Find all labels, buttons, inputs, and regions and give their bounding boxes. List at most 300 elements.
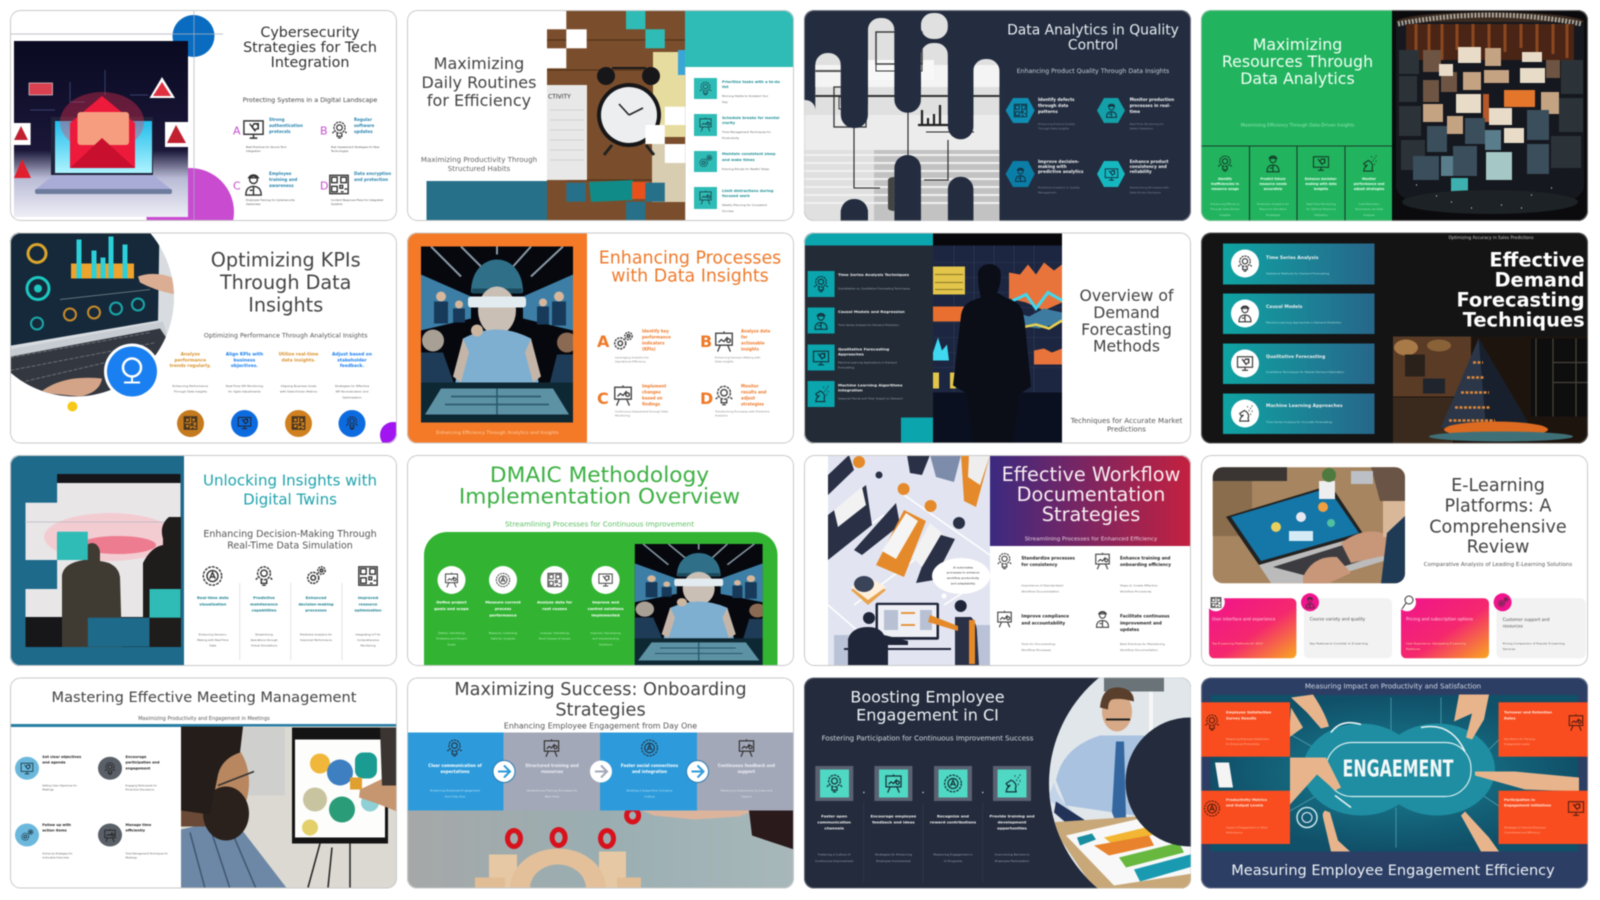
item C: based on [642,395,663,400]
item 3: Follow up with [42,823,72,827]
card: Boosting Employee Engagement [804,678,1254,888]
item 1 [694,78,780,104]
column 1: Enhancing Decision- [199,632,227,636]
photo: woman in visor [421,246,577,422]
step 1 [428,740,482,799]
item 4: Streamlining Processes with [1130,186,1169,190]
item 3: Forecasting [838,366,854,370]
column 4 [1354,156,1385,217]
title: DMAIC Methodology [490,462,709,488]
header panel: Strategies [1042,502,1140,526]
dark panel [804,232,933,444]
title: Methods [1093,336,1160,355]
step Define [434,566,469,646]
column 3 [1305,157,1338,217]
header panel: Documentation [1017,482,1165,506]
item 4 [1097,158,1169,195]
column 4: stakeholder [337,357,368,363]
item 3 [998,611,1069,652]
item 2: Encourage [126,755,147,759]
illustration: folders and workers [828,455,990,666]
column 4: Optimization [342,396,362,400]
item 3: action items [42,829,67,833]
subtitle: Real-Time Data Simulation [227,540,353,551]
item 1 [1006,96,1075,131]
title: Enhancing Processes [599,248,781,268]
box 3: User Experience: Navigating E-Learning [1406,641,1466,645]
item 2: Productive Discussions [126,787,155,791]
title: Review [1467,538,1529,558]
photo: people at heat map wall [25,474,181,647]
item B: B [700,332,712,351]
item 4: updates [1120,626,1140,632]
panel 2 [1223,294,1374,334]
column 3: Utilize real-time [279,351,318,357]
item A: protocols [269,128,291,134]
subtitle: Enhancing Decision-Making Through [203,528,377,540]
item 4: Limit distractions during [722,189,774,193]
item 3: Predictive Analytics in Quality [1038,186,1080,190]
title: Data Analytics [1240,68,1355,88]
column 2: accurately [1264,187,1283,191]
panel 4 [1223,394,1374,434]
item 3: Tools for Documenting [1020,642,1055,646]
pixel cut-outs [26,474,181,647]
column 4: performance and [1354,182,1385,186]
title: Demand [1494,268,1585,291]
step 4: Overcoming Barriers to [995,853,1030,857]
title: Maximizing [434,54,524,72]
card: Overview of Demand Forecasting [804,232,1191,444]
item A: performance [642,334,671,339]
item 2: Steps to Create Effective [1120,584,1157,588]
step 1: Clear communication of [428,762,482,768]
step Analyze: root causes [542,606,568,610]
item B: Technologies [330,149,349,153]
item 2 [694,114,779,140]
box 3 [1398,593,1489,658]
step 3: Recognize and [937,813,969,818]
item 4: consistency and [1130,164,1167,168]
column 2: Virtual Simulations [251,644,278,648]
step 4 [989,766,1035,863]
item 4: Facilitate continuous [1120,613,1170,618]
item C: C [597,389,609,408]
step Improve [588,566,624,646]
title: Insights [248,293,323,316]
step 3: Building a Supportive Company [627,789,673,793]
box 2: Course variety and quality [1310,616,1366,622]
column 4: Adjust based on [332,351,372,357]
footer title: Measuring Employee Engagement Efficiency [1231,863,1555,879]
item 2: participation and [126,761,160,765]
column 1: Through Data Insights [173,390,207,394]
item A [597,328,671,364]
column 4: feedback. [340,362,364,368]
title: Maximizing [1253,34,1342,54]
photo: laptop with warning email [14,41,188,217]
box 2: Key Features to Consider in E-Learning [1310,641,1368,645]
item 3: predictive analytics [1038,168,1084,174]
column 4: Monitor [1362,177,1376,181]
column 3: Improved Performance [300,638,332,642]
card: Measuring Employee Engagement [1201,678,1588,888]
item 1: Identify defects [1038,96,1075,102]
column 4: resource [359,601,378,606]
item 3: Improve decision- [1038,158,1080,164]
item D: Systems [331,202,343,206]
title: Implementation Overview [459,484,740,509]
step Define: Define project [436,599,467,604]
column 4 [355,567,382,648]
column 2: Predictive Analytics for [1257,202,1290,206]
item D: Monitor [741,383,759,388]
column 3: Predictive Analytics for [300,632,333,636]
item C: Continuous Assessment through Data [615,410,668,414]
step Improve: and Implementing [592,637,619,641]
photo: data cylinder [1392,10,1588,221]
column 1: Making with Real-Time [197,638,229,642]
box 4: Services [1503,647,1516,651]
item D: Incident Response Plans for Integrated [331,198,383,202]
item D: Analytics [715,414,728,418]
header panel: Streamlining Processes for Enhanced Efficiency [1025,536,1158,542]
item C: awareness [269,182,294,188]
step 2: feedback and ideas [872,819,915,824]
item 4: focused work [722,194,750,198]
title: Mastering Effective Meeting Management [52,689,357,706]
subtitle: Techniques for Accurate Market [1070,416,1183,424]
column 2: Streamlining [255,632,273,636]
panel 4: Machine Learning Approaches [1266,403,1343,409]
item 1: Setting Clear Objectives for [42,783,78,787]
step 4: Employee Participation [995,859,1029,863]
column 4: Analysis [1363,213,1375,217]
item 1: Morning Habits to Kickstart Your [722,94,769,98]
step 1: expectations [440,768,470,774]
title: Data Analytics in Quality [1007,23,1179,39]
item 3: Evening Rituals for Restful Sleep [722,167,769,171]
item 4: Meetings [126,855,138,859]
subtitle: Protecting Systems in a Digital Landscape [243,96,377,104]
item D: D [700,389,713,408]
card: Mastering Effective Meeting Management [10,678,397,888]
globe badge [104,344,160,400]
step Improve: implemented [591,612,620,617]
step Measure: Measure current [485,599,521,604]
item A: A [233,124,241,138]
item 4: Data-Driven Decisions [1130,191,1161,195]
item 2: processes in real- [1130,102,1171,108]
card: Optimizing KPIs [9,232,398,444]
speech bubble: AI automates [953,565,973,569]
item 4: reliability [1130,168,1152,174]
title: Optimizing KPIs [211,248,361,271]
item B: Enhancing Decision-Making with [715,356,761,360]
item 2: Defect Detection [1130,127,1154,131]
box top-right: Engagement Levels [1504,742,1530,746]
teal panel [685,10,794,67]
step Measure: Data for Analysis [491,637,516,641]
arrow 3 [686,760,708,782]
title: Forecasting [1081,320,1172,338]
subtitle: Streamlining Processes for Continuous Improvement [505,520,694,528]
item 2: Workflow Procedures [1120,590,1152,594]
arrow 2 [590,760,612,782]
card: E-Learning Platforms [1201,455,1588,666]
box top-left: Survey Results [1226,716,1256,720]
photo: dashboard on laptop [10,232,174,398]
box 4: resources [1503,623,1523,628]
item 1: Prioritize tasks with a to-do [722,80,780,84]
blue panel [10,455,184,666]
box bottom-right [1498,791,1588,844]
step Measure: Measure: Collecting [489,631,517,635]
item 4: Enhance product [1130,158,1169,164]
column 4: Comprehensive [357,638,379,642]
step 1: communication [817,819,851,824]
step 3: Measuring Engagement in [933,853,973,857]
photo: alarm clock on desk [547,10,685,221]
card: Maximizing Daily Routines [407,10,794,221]
subtitle: Enhancing Employee Engagement from Day One [504,722,697,730]
item B: updates [354,128,373,134]
item 1: for consistency [1021,562,1058,566]
item 1: Standardize processes [1021,555,1075,560]
column 1: Insights [1220,213,1231,217]
item 2 [1097,96,1174,131]
item 3 [694,151,776,172]
step 2 [871,766,917,863]
column 2: capabilities [252,607,277,612]
title: Unlocking Insights with [203,472,377,490]
column 4: optimization [355,607,382,612]
panel 3: Qualitative Forecasting [1266,354,1325,360]
box 1: User interface and experience [1212,616,1276,622]
title: Maximizing Success: Onboarding [454,680,747,700]
photo: alarm clock on desk: CTIVITY [548,94,571,100]
item 1: and agenda [42,761,66,765]
item B [320,116,380,153]
title: Techniques [1463,308,1585,331]
column 3: for Optimal Resource [1306,207,1336,211]
title: E-Learning [1451,476,1545,496]
subtitle: Optimizing Performance Through Analytical Insights [204,332,368,340]
item B: Risk Assessment Strategies for New [331,145,380,149]
speech bubble: and adaptability [951,581,975,585]
item B: for [741,334,747,339]
column 3: insights [1314,187,1328,191]
item A: A [597,332,610,351]
ENGAEMENT wordmark: ENGAEMENT [1342,756,1454,782]
column 3: Utilization [1314,213,1328,217]
step 1: Fostering a Culture of [818,853,851,857]
pixel cut-outs [547,10,685,221]
item 3: Approaches [838,351,865,356]
column 1: Enhancing Efficiency [1210,202,1240,206]
column 1: resource usage [1211,187,1239,191]
item 4 [98,823,169,859]
item 2: Time Management Techniques for [721,130,772,134]
item 2 [808,308,905,334]
step 1: Enhancing Employee Engagement [430,789,481,793]
item D: and protection [354,176,388,182]
item B: software [354,122,375,128]
column 1: visualization [199,601,227,606]
column 4: Techniques via Data [1354,207,1383,211]
orange panel [407,232,587,444]
item 1: list [722,85,729,89]
item D: strategies [741,401,765,406]
step Analyze: Analyze: Identifying [540,631,569,635]
title: Overview of [1080,286,1174,304]
column 4 [332,351,372,437]
column 4: Integrating IoT for [355,632,382,636]
item 3: Qualitative Forecasting [838,346,890,351]
card: Effective Demand Forecasting [1201,232,1588,444]
step Define: goals and scope [434,606,469,610]
item C [597,383,668,418]
item A: authentication [269,122,303,128]
column 2: Resource Allocation [1259,207,1287,211]
photo: man at whiteboard [181,726,397,888]
subtitle: Enhancing Product Quality Through Data Insights [1017,68,1169,75]
item D [700,383,770,418]
step 2: Streamlining Training Processes for [527,789,578,793]
column 3 [279,351,318,437]
step 2: New Hires [545,795,560,799]
title: Strategies for Tech [243,40,377,56]
item 1: patterns [1038,108,1058,114]
item A: indicators [642,340,665,345]
title: Effective [1489,248,1585,271]
item A: Identify key [642,328,669,333]
item C: training and [269,176,297,182]
panel 2: Causal Models [1266,304,1303,310]
subtitle: Predictions [1107,424,1146,433]
item B: Analyze data [741,328,771,333]
subtitle: Structured Habits [448,164,510,172]
item 1: Day [722,100,728,104]
item D: results and [741,389,767,394]
step Measure: process [495,606,512,610]
card: Maximizing Success Onboarding [407,678,794,888]
item D: D [320,180,328,192]
column 2: Align KPIs with [226,351,263,357]
panel 1: Time Series Analysis [1266,255,1319,261]
item 4: efficiently [126,829,146,833]
item C: Employee [269,170,292,176]
step 1 [815,766,854,863]
title: Through Data [219,270,351,294]
step 4: Impact [741,795,752,799]
item 4: Integration [838,387,863,392]
item B: insights [741,346,760,351]
photo: pyramid in a room [1393,336,1588,444]
item 2: clarity [722,121,736,125]
photo: woman in visor [635,544,766,666]
item A [233,116,303,153]
dark circle overlay [1126,718,1254,846]
item 2: Causal Models and Regression [838,309,905,314]
box 2 [1301,593,1392,658]
item A: (KPIs) [642,346,656,351]
step Improve: Solutions [599,642,613,646]
column 2: objectives. [231,362,258,368]
step 1: Foster open [821,813,847,818]
step Analyze: Root Causes of Issues [539,637,571,641]
item 4: Workflow Documentation [1120,648,1158,652]
item 4: Manage time [126,823,152,827]
item 4 [694,187,774,213]
item 3: Workflow Processes [1021,648,1051,652]
item A: Integration [246,149,261,153]
column 4: Cost Reduction [1358,202,1380,206]
item 1: Time Series Analysis Techniques [838,272,910,277]
item 1: Set clear objectives [42,755,81,759]
item 1: Quantitative vs. Qualitative Forecasting Techniques [838,286,910,290]
title: Demand [1093,302,1160,322]
blue block [426,180,548,221]
item 3: and wake times [722,158,755,162]
step 1: from Day One [445,795,465,799]
title: Comprehensive [1429,517,1567,537]
box bottom-left [1201,791,1290,844]
item 1: Workflow Documentation [1021,590,1059,594]
item 2: Engaging Participants for [126,783,158,787]
item 3: Improve compliance [1021,613,1069,618]
item A: Best Practices for Secure Tech [246,145,287,149]
card: DMAIC Methodology [407,455,794,666]
title: Engagement in CI [856,705,999,724]
dark capsules [840,24,974,220]
item C: Awareness [246,202,261,206]
item C: findings [642,401,661,406]
box 4: Pricing Comparison of Popular E-Learning [1503,641,1565,645]
item 4: Time Management Techniques for [126,851,169,855]
card: Unlocking Insights with Digital Twins [10,455,397,666]
panel 2: Machine Learning Approaches in Demand Prediction [1266,320,1342,324]
item 4: Best Practices for Maintaining [1120,642,1165,646]
item 3 [808,344,897,370]
column 4: adjust strategies [1354,187,1384,191]
step Analyze [537,566,572,641]
column 3: decision-making [298,601,334,606]
panel 4: Time Series Analysis for Accurate Forecasting [1265,420,1332,424]
item 2: Monitor production [1130,96,1174,102]
footer caption: Enhancing Efficiency Through Analytics and Insights [436,430,559,436]
column 3: Enhanced [306,594,327,600]
step Improve: Improve and [592,599,619,604]
item 2: onboarding efficiency [1120,562,1171,566]
box top-left: for Enhanced Productivity [1226,742,1260,746]
title: Integration [271,55,349,71]
column 4: Improved [358,594,378,600]
item 3: making with [1038,164,1067,168]
photo: greyscale data windows [804,10,1000,221]
item 2 [98,755,160,791]
item C [233,170,297,206]
card: Data Analytics in Quality Control [803,9,1192,222]
column 2: Operations through [250,638,278,642]
column 2: for Agile Adjustments [228,390,261,394]
box bottom-right: Strategies to Improve Employee [1504,825,1546,829]
item A: Operational Efficiency [615,360,646,364]
column 2: Real-Time KPI Monitoring [226,384,263,388]
item B: Data Insights [715,360,734,364]
column 2: maintenance [250,601,278,606]
item 3: Actionable Outcomes [42,855,70,859]
